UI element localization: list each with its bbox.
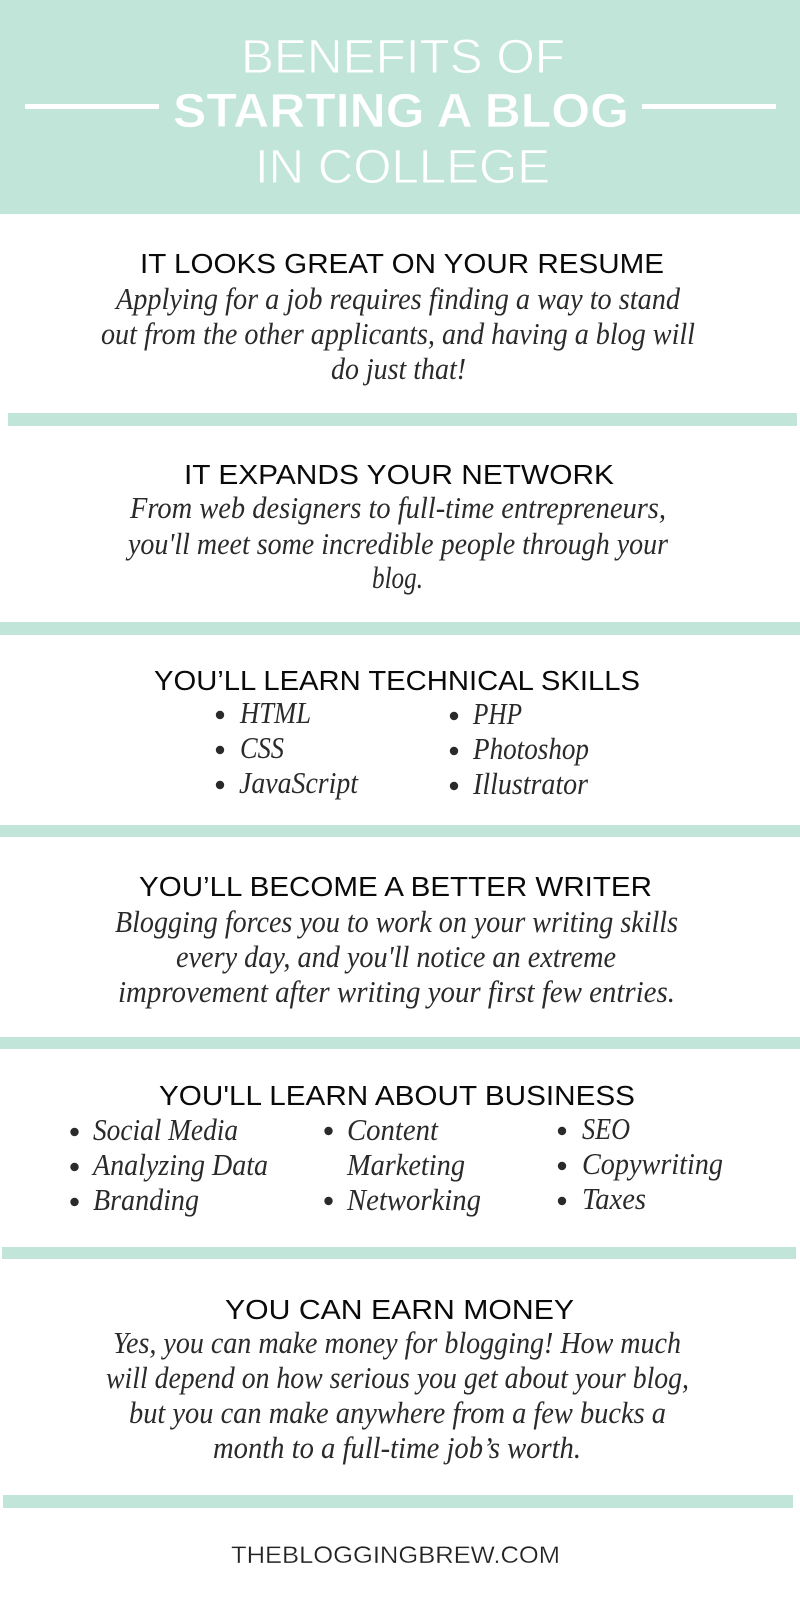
list: business column 1: Social Media bbox=[93, 1113, 238, 1147]
text block: resume bbox=[101, 282, 695, 386]
list: business column 3: Taxes bbox=[582, 1182, 646, 1216]
heading: business: YOU'LL LEARN ABOUT BUSINESS bbox=[159, 1080, 635, 1111]
list: skills column 1 bbox=[216, 696, 359, 800]
heading: resume: IT LOOKS GREAT ON YOUR RESUME bbox=[140, 248, 664, 279]
text block: earn money: will depend on how serious you get about your blog, bbox=[106, 1361, 689, 1395]
text block: network: blog. bbox=[372, 561, 423, 595]
panel: network bbox=[125, 459, 668, 595]
list: skills column 2: Illustrator bbox=[472, 767, 588, 801]
list: business column 1: Branding bbox=[93, 1183, 199, 1217]
panel: earn money bbox=[106, 1294, 689, 1465]
list: business column 2: Content bbox=[347, 1113, 439, 1147]
text block: network: From web designers to full-time entrepreneurs, bbox=[129, 491, 666, 525]
title line: starting a blog: STARTING A BLOG bbox=[173, 85, 629, 138]
list: business column 2 bbox=[324, 1113, 481, 1217]
panel: resume bbox=[101, 248, 695, 386]
list: business column 2: Marketing bbox=[346, 1148, 465, 1182]
title rule left bbox=[25, 104, 159, 109]
heading: earn money: YOU CAN EARN MONEY bbox=[225, 1294, 574, 1325]
list: skills column 2 bbox=[450, 697, 589, 801]
footer: website: THEBLOGGINGBREW.COM bbox=[231, 1542, 560, 1569]
text block: better writer: improvement after writing your first few entries. bbox=[118, 975, 675, 1009]
title rule right bbox=[642, 104, 776, 109]
list: business column 3: SEO bbox=[582, 1112, 630, 1146]
text block: earn money: month to a full-time job’s worth. bbox=[213, 1431, 581, 1465]
list: skills column 2: Photoshop bbox=[472, 732, 589, 766]
text block: network bbox=[125, 491, 668, 595]
panel: better writer bbox=[115, 871, 678, 1009]
list: skills column 1: JavaScript bbox=[239, 766, 359, 800]
panel: title banner bbox=[0, 0, 800, 214]
panel: business bbox=[70, 1080, 723, 1217]
list: business column 1: Analyzing Data bbox=[91, 1148, 268, 1182]
text block: resume: do just that! bbox=[331, 352, 466, 386]
title line: in college: IN COLLEGE bbox=[255, 141, 550, 194]
text block: network: you'll meet some incredible people through your bbox=[125, 527, 668, 561]
heading: better writer: YOU’LL BECOME A BETTER WRITER bbox=[139, 871, 652, 902]
list: skills column 2: PHP bbox=[472, 697, 522, 731]
list: business column 1 bbox=[70, 1113, 268, 1217]
list: skills column 1: CSS bbox=[240, 731, 284, 765]
list: business column 2: Networking bbox=[346, 1183, 481, 1217]
text block: better writer: Blogging forces you to work on your writing skills bbox=[115, 905, 678, 939]
panel: technical skills bbox=[154, 665, 640, 801]
text block: earn money: but you can make anywhere from a few bucks a bbox=[129, 1396, 666, 1430]
title line: benefits of: BENEFITS OF bbox=[241, 31, 565, 84]
text block: earn money: Yes, you can make money for blogging! How much bbox=[113, 1326, 681, 1360]
list: business column 3: Copywriting bbox=[582, 1147, 723, 1181]
heading: technical skills: YOU’LL LEARN TECHNICAL SKILLS bbox=[154, 665, 640, 696]
text block: resume: Applying for a job requires finding a way to stand bbox=[114, 282, 681, 316]
text block: earn money bbox=[106, 1326, 689, 1465]
text block: better writer bbox=[115, 905, 678, 1009]
text block: better writer: every day, and you'll notice an extreme bbox=[176, 940, 616, 974]
text block: resume: out from the other applicants, and having a blog will bbox=[101, 317, 695, 351]
heading: network: IT EXPANDS YOUR NETWORK bbox=[184, 459, 615, 490]
list: skills column 1: HTML bbox=[239, 696, 311, 730]
list: business column 3 bbox=[558, 1112, 723, 1216]
